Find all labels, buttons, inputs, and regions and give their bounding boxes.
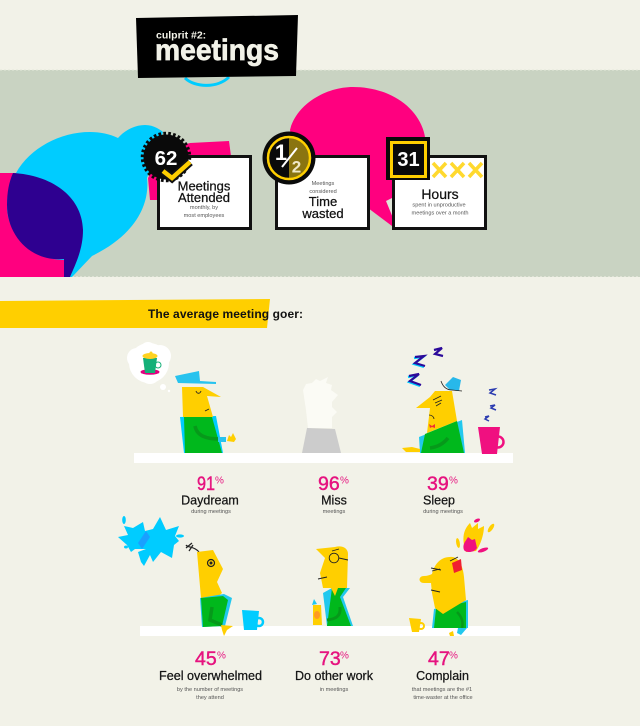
card: time wasted	[276, 156, 368, 228]
stat: 45% feel overwhelmed: by the number of meetings	[177, 687, 243, 693]
stat: 73% do other work	[295, 648, 374, 693]
badge: one half: 2	[292, 158, 301, 176]
figure: complainer	[409, 518, 496, 636]
card: hours: spent in unproductive	[412, 202, 466, 208]
stat: 91% daydream	[181, 473, 239, 515]
subheading band: The average meeting goer:	[148, 307, 303, 321]
stat: 39% sleep: 39	[427, 473, 449, 495]
pink mug	[478, 389, 504, 454]
splash	[118, 516, 184, 566]
stat: 91% daydream: 91	[197, 473, 215, 495]
stat: 73% do other work: Do other work	[295, 669, 374, 683]
stat: 47% complain: %	[449, 650, 458, 662]
stat: 96% miss: Miss	[321, 494, 347, 508]
stat: 47% complain: Complain	[416, 669, 469, 683]
title block: culprit #2:	[156, 30, 206, 42]
title block: meetings	[155, 34, 279, 67]
stat: 73% do other work: 73	[319, 648, 341, 670]
card: meetings attended	[158, 156, 250, 228]
card: meetings attended: monthly, by	[190, 205, 218, 211]
grey-green band	[0, 70, 640, 277]
badge: one half: 1	[275, 140, 287, 165]
shelf row two	[140, 626, 520, 636]
badge: 31: 31	[397, 149, 420, 171]
stat: 45% feel overwhelmed: Feel overwhelmed	[159, 669, 262, 683]
thought bubble	[127, 342, 171, 392]
figure: overwhelmed	[118, 516, 263, 636]
card: hours: meetings over a month	[412, 210, 468, 216]
card: time wasted: considered	[309, 189, 337, 195]
stat: 39% sleep: %	[449, 476, 458, 486]
subheading band	[0, 299, 303, 328]
stat: 96% miss: 96	[318, 473, 340, 495]
flame	[455, 518, 496, 554]
stat: 39% sleep: Sleep	[423, 494, 455, 508]
speech bubbles left	[0, 125, 163, 277]
stat: 47% complain: 47	[428, 648, 450, 670]
card: time wasted: Time	[309, 194, 337, 209]
stat: 45% feel overwhelmed: they attend	[196, 695, 224, 701]
badge: one half	[262, 132, 316, 184]
shelf row one	[134, 453, 513, 463]
stat: 47% complain: time-waster at the office	[413, 695, 473, 701]
pink bubble behind first card	[148, 141, 231, 200]
card: hours	[394, 156, 486, 228]
stat: 47% complain: that meetings are the #1	[412, 687, 472, 693]
figure: sleeper	[402, 348, 504, 454]
stat: 96% miss	[318, 473, 349, 515]
stat: 91% daydream: Daydream	[181, 494, 239, 508]
title block	[136, 15, 298, 78]
badge: 31	[386, 137, 430, 180]
stat: 45% feel overwhelmed: 45	[195, 648, 217, 670]
stat: 45% feel overwhelmed	[159, 648, 262, 701]
figure: absent ghost	[302, 377, 341, 453]
stat: 39% sleep	[423, 473, 463, 515]
bubble arc under title	[185, 77, 229, 85]
stat: 39% sleep: during meetings	[423, 509, 463, 515]
card: meetings attended: most employees	[184, 213, 225, 219]
card: time wasted: wasted	[301, 206, 344, 221]
stat: 47% complain	[412, 648, 473, 701]
stat: 73% do other work: in meetings	[320, 687, 349, 693]
stat: 45% feel overwhelmed: %	[217, 650, 226, 662]
stat: 96% miss: %	[340, 476, 349, 486]
sleep z letters	[408, 348, 443, 386]
badge: 62	[143, 134, 190, 180]
figure: multitasker	[312, 546, 353, 626]
card: time wasted: Meetings	[312, 181, 335, 187]
card: meetings attended: Attended	[178, 190, 230, 205]
card: meetings attended: Meetings	[178, 178, 231, 194]
stat: 91% daydream: during meetings	[191, 509, 231, 515]
badge: 62: 62	[155, 147, 177, 170]
figure: daydreamer	[127, 342, 236, 453]
stat: 96% miss: meetings	[323, 509, 346, 515]
stat: 91% daydream: %	[215, 476, 224, 486]
cyan mug	[242, 610, 263, 630]
stat: 73% do other work: %	[340, 650, 349, 662]
icon: three yellow crosses	[433, 163, 482, 177]
card: hours: Hours	[421, 186, 459, 202]
yellow mug	[409, 618, 424, 632]
big pink speech bubble	[290, 87, 425, 226]
